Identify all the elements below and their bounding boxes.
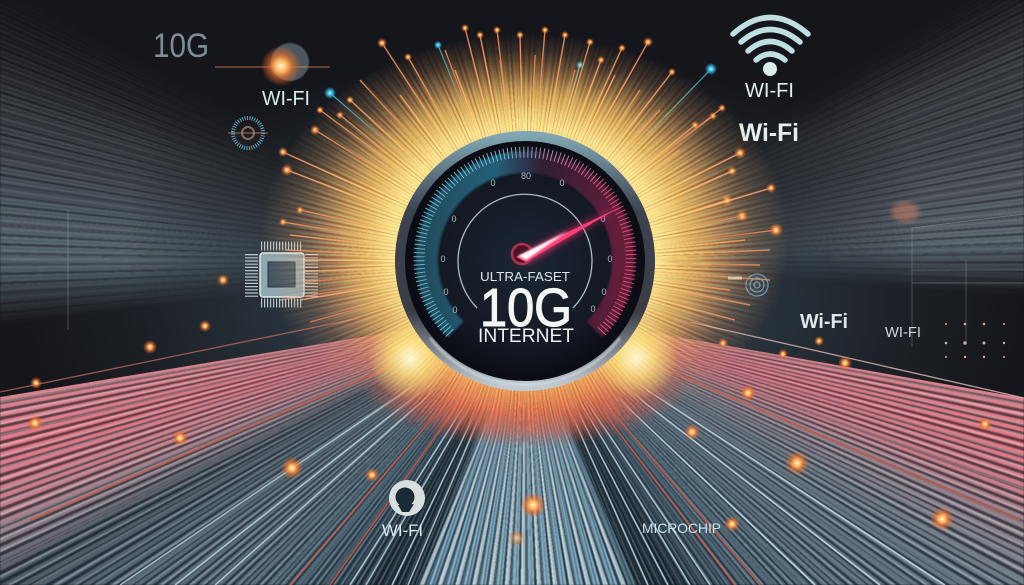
inner gauge arc xyxy=(458,194,592,308)
gauge title: 10G: 10G xyxy=(480,278,572,338)
gauge scale numbers: 0 xyxy=(559,178,565,188)
bright lower rim line xyxy=(430,338,620,385)
dial bezel xyxy=(400,136,650,386)
glowing data points along the lower streaks xyxy=(27,320,992,547)
extra bright fibres crossing the dark gaps below the dial xyxy=(120,310,945,585)
fibre end dots xyxy=(217,24,783,286)
needle xyxy=(516,207,620,262)
orange fibres radiating from the dial xyxy=(275,28,776,322)
bright central fibre stripes xyxy=(415,414,640,585)
needle hub xyxy=(512,244,532,264)
red streaks under the dial xyxy=(366,358,684,446)
label: WI-FI under icon: WI-FI xyxy=(745,80,794,102)
gauge scale numbers: 0 xyxy=(590,304,596,314)
gauge colour band xyxy=(427,162,623,329)
gauge scale numbers: 0 xyxy=(443,287,449,297)
gauge scale numbers: 0 xyxy=(601,287,607,297)
lens flare with pale sphere xyxy=(215,43,330,86)
node dot grid xyxy=(945,323,1005,358)
label: small WI-FI: WI-FI xyxy=(885,325,921,341)
upper streak wedges left and right xyxy=(0,0,1024,320)
red-orange fibres below the dial xyxy=(30,310,1020,585)
gauge scale numbers: 0 xyxy=(451,214,457,224)
icon: microchip xyxy=(252,246,312,303)
gauge scale numbers: 0 xyxy=(607,254,613,264)
upper edges of the pink bands xyxy=(0,318,1024,398)
burst rays xyxy=(266,37,784,434)
label: WI-FI bottom: WI-FI xyxy=(382,521,423,540)
gauge scale numbers: 0 xyxy=(600,214,606,224)
label: 10G: 10G xyxy=(153,27,209,65)
icon: wi-fi symbol xyxy=(733,18,808,76)
icon: circular dial badge xyxy=(228,118,268,148)
cyan fibres xyxy=(330,45,711,262)
needle core xyxy=(518,231,568,260)
gauge scale numbers xyxy=(440,171,613,315)
gauge title: ULTRA-FASET: ULTRA-FASET xyxy=(480,269,570,284)
icon: round wi-fi badge xyxy=(389,480,425,516)
label: WI-FI near flare: WI-FI xyxy=(262,88,310,110)
icon: small spiral xyxy=(728,274,768,296)
dial face xyxy=(406,142,644,380)
faint orange blob in the right streaks xyxy=(891,202,919,222)
thin grid lines at the right xyxy=(68,210,1024,347)
needle glow xyxy=(515,205,622,262)
gauge scale numbers: 80 xyxy=(521,171,531,181)
fibre streaks fanning out below the dial, with pink side bands xyxy=(0,330,1024,585)
gauge title: INTERNET: INTERNET xyxy=(478,326,574,347)
label: Wi-Fi right: Wi-Fi xyxy=(800,311,848,333)
label: MICROCHIP: MICROCHIP xyxy=(642,520,721,536)
gauge tick marks xyxy=(419,152,631,333)
label: bold Wi-Fi: Wi-Fi xyxy=(739,119,799,147)
gauge scale numbers: 0 xyxy=(452,305,458,315)
gauge scale numbers: 0 xyxy=(440,254,446,264)
yellow burst glow xyxy=(321,56,729,428)
gauge scale numbers: 0 xyxy=(490,178,496,188)
